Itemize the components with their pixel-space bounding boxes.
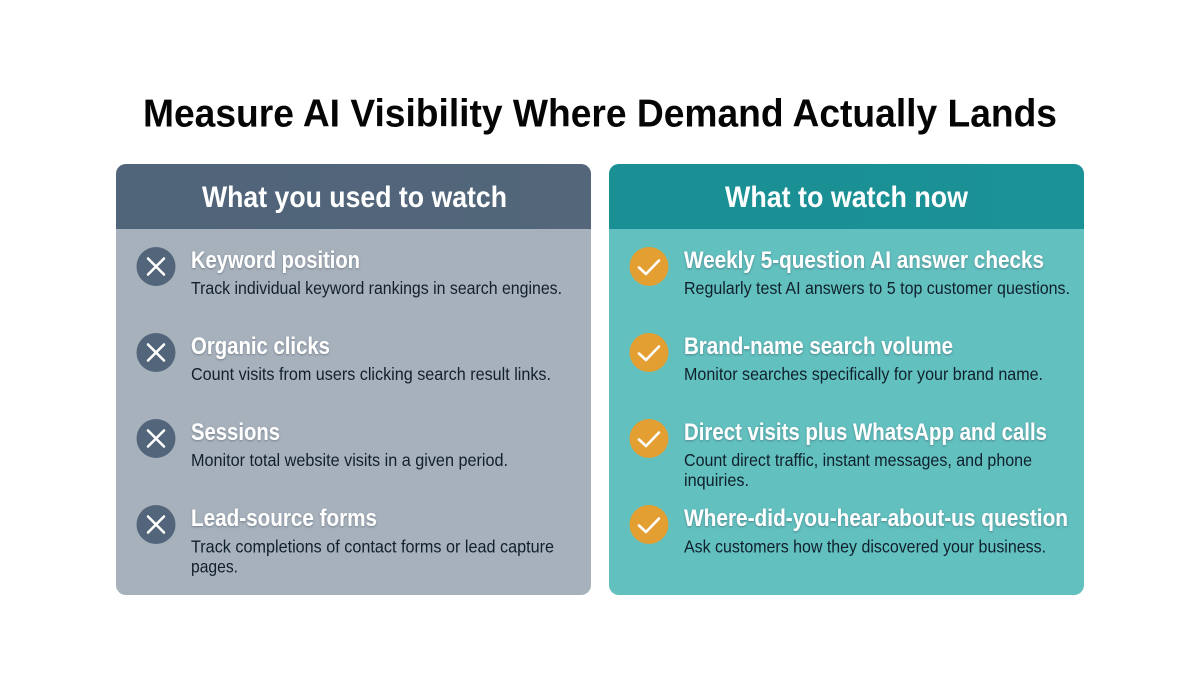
item: brand-name search volume (630, 333, 1043, 384)
title: Measure AI Visibility Where Demand Actually Lands (143, 92, 1057, 136)
right panel body (609, 164, 1084, 595)
left heading: What you used to watch (202, 181, 507, 214)
icon: cross (136, 419, 176, 458)
item: keyword position (136, 247, 562, 298)
icon: check (630, 419, 668, 458)
icon: check (630, 505, 668, 544)
item description: Count direct traffic, instant messages, and phone (684, 450, 1032, 470)
item: where did you hear about us (630, 505, 1068, 556)
icon: cross (136, 333, 176, 372)
item description: Monitor searches specifically for your brand name. (684, 364, 1043, 384)
item title: Brand-name search volume (684, 333, 953, 360)
item title: Weekly 5-question AI answer checks (684, 247, 1044, 274)
item: weekly checks (630, 247, 1070, 298)
item description: Track completions of contact forms or lead capture (191, 536, 554, 556)
item: sessions (136, 419, 508, 470)
item title: Organic clicks (191, 333, 330, 360)
icon: cross (136, 247, 176, 286)
panel: what to watch now (609, 164, 1084, 595)
item title: Lead-source forms (191, 505, 377, 532)
item description (191, 536, 554, 576)
item title: Sessions (191, 419, 280, 446)
item title: Keyword position (191, 247, 360, 274)
item title: Where-did-you-hear-about-us question (684, 505, 1068, 532)
item description: Ask customers how they discovered your business. (684, 536, 1046, 556)
item: organic clicks (136, 333, 551, 384)
panel: what you used to watch (116, 164, 591, 595)
item title: Direct visits plus WhatsApp and calls (684, 419, 1047, 446)
left panel header (116, 164, 591, 229)
icon: cross (136, 505, 176, 544)
item description: Regularly test AI answers to 5 top customer questions. (684, 278, 1070, 298)
item: direct visits (630, 419, 1047, 490)
item: lead-source forms (136, 505, 554, 576)
left panel body (116, 164, 591, 595)
item description: Track individual keyword rankings in search engines. (191, 278, 562, 298)
right heading: What to watch now (725, 181, 969, 214)
icon: check (630, 333, 668, 372)
icon: check (630, 247, 668, 286)
item description (684, 450, 1032, 490)
item description: pages. (191, 556, 238, 576)
item description: Count visits from users clicking search result links. (191, 364, 551, 384)
right panel header (609, 164, 1084, 229)
item description: Monitor total website visits in a given period. (191, 450, 508, 470)
item description: inquiries. (684, 470, 749, 490)
